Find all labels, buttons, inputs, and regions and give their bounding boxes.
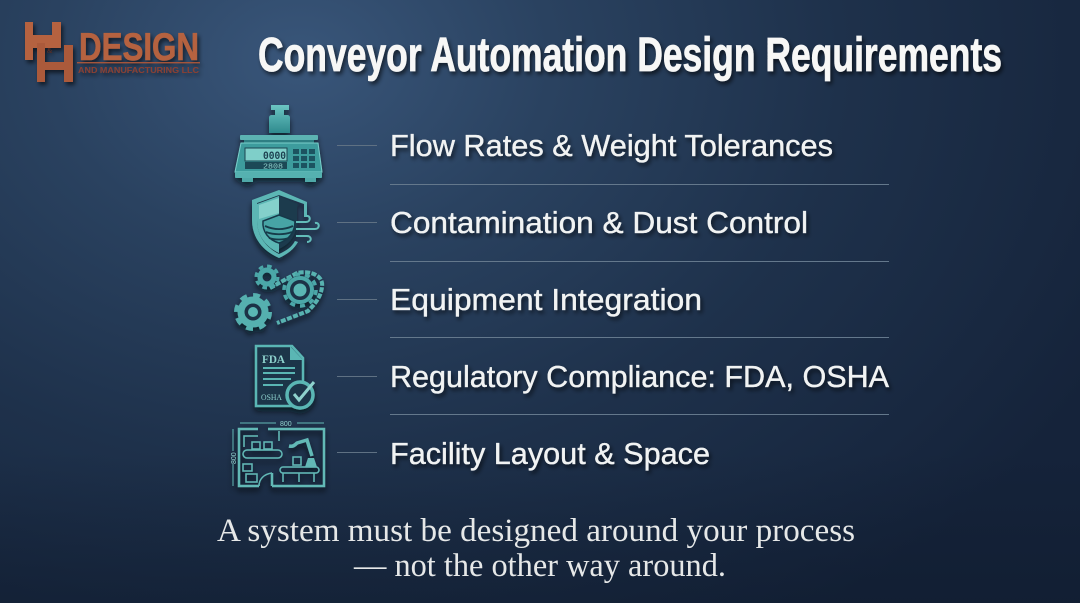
icon: gears and chain bbox=[236, 266, 322, 329]
label: Facility Layout & Space bbox=[390, 436, 710, 471]
icon: floor plan: 800 bbox=[280, 421, 292, 428]
row 3: equipment integration bbox=[236, 266, 702, 329]
logo: H&H Design and Manufacturing: DESIGN bbox=[79, 26, 199, 69]
icon: weighing scale bbox=[235, 105, 322, 182]
divider bbox=[390, 337, 889, 338]
connector line bbox=[337, 452, 377, 453]
connector line bbox=[337, 299, 377, 300]
row 2: contamination and dust control bbox=[252, 190, 808, 258]
icon: shield with mask bbox=[252, 190, 319, 258]
closing statement: A system must be designed around your process bbox=[217, 513, 855, 549]
row 5: facility layout bbox=[231, 421, 710, 486]
connector line bbox=[337, 145, 377, 146]
connector line bbox=[337, 222, 377, 223]
icon: document with check bbox=[256, 346, 314, 408]
icon: weighing scale: 2808 bbox=[263, 164, 283, 172]
icon: document with check: OSHA bbox=[261, 392, 283, 402]
closing statement bbox=[217, 513, 855, 584]
label: Equipment Integration bbox=[390, 282, 702, 317]
row 1: flow rates and weight tolerances bbox=[235, 105, 833, 182]
label: Contamination & Dust Control bbox=[390, 205, 808, 240]
label: Flow Rates & Weight Tolerances bbox=[390, 128, 833, 163]
icon: document with check: FDA bbox=[262, 352, 285, 366]
icon: floor plan: 800 bbox=[231, 452, 238, 464]
closing statement: — not the other way around. bbox=[353, 548, 726, 584]
logo: H&H Design and Manufacturing: AND MANUFACTURING LLC bbox=[78, 65, 199, 75]
icon: weighing scale: 0000 bbox=[263, 151, 286, 163]
divider bbox=[390, 414, 889, 415]
row 4: regulatory compliance bbox=[256, 346, 889, 408]
connector line bbox=[337, 376, 377, 377]
divider bbox=[390, 184, 889, 185]
icon: floor plan bbox=[231, 421, 324, 486]
label: Regulatory Compliance: FDA, OSHA bbox=[390, 359, 889, 394]
list: requirements bbox=[231, 105, 889, 486]
logo: H&H Design and Manufacturing: & bbox=[47, 47, 53, 55]
divider bbox=[390, 261, 889, 262]
logo: H&H Design and Manufacturing bbox=[25, 22, 200, 82]
